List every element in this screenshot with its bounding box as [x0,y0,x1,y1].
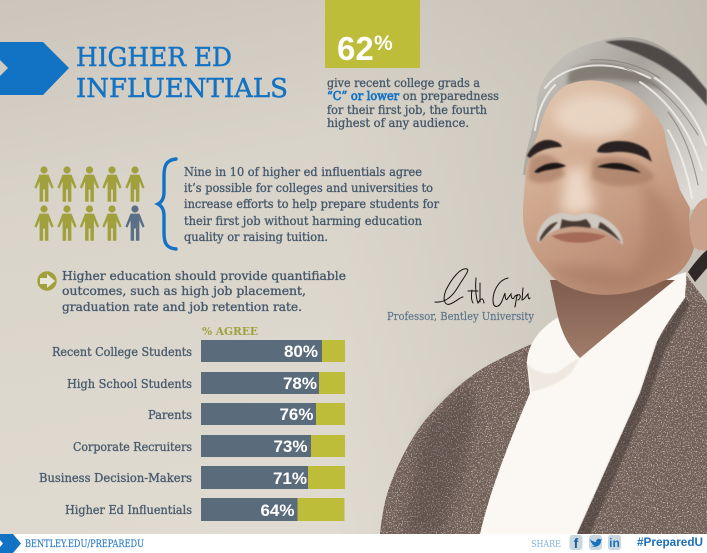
stat box: 62%: 62 [337,30,374,67]
bar: Higher Ed Influentials: 64% [260,501,294,520]
mustache dark [540,219,621,242]
paragraph: nine in ten: it’s possible for colleges and universities to [184,181,433,195]
icon: linkedin: in [609,536,620,550]
lips [552,232,606,243]
pictogram: nine of ten people [34,166,145,241]
bar: High School Students: 78% [283,374,317,393]
share label: SHARE [531,539,561,550]
stat text: “C” or lower on preparedness [327,89,499,103]
bar: High School Students: High School Students [67,377,192,391]
stat text: highest of any audience. [327,116,469,130]
signature [435,269,530,307]
forehead light [554,94,638,138]
title: INFLUENTIALS [76,74,288,104]
hair wisps [535,65,706,198]
ear [686,198,707,250]
shirt fold [527,358,580,392]
bar: Parents [148,403,345,425]
stat text: for their first job, the fourth [327,103,487,117]
nose highlight [561,165,596,214]
chart heading: % AGREE [202,324,258,338]
shirt [480,272,686,534]
face [523,80,694,295]
cheek shade [620,180,680,287]
statement text: graduation rate and job retention rate. [62,300,302,314]
statement text: outcomes, such as high job placement, [62,284,306,298]
mustache [537,213,623,245]
left eye [534,163,566,173]
dark hair streak [605,40,707,106]
title [76,43,288,104]
footer link: BENTLEY.EDU/PREPAREDU [25,539,144,550]
right eyebrow [597,141,652,162]
title arrow [0,42,69,95]
icon: arrow bullet [37,271,57,291]
bar: Parents: Parents [148,408,192,422]
bar: Corporate Recruiters: Corporate Recruiters [73,440,192,454]
icon: twitter [589,535,602,550]
bar: Business Decision-Makers [39,466,345,489]
stat text: give recent college grads a [327,76,480,90]
paragraph: nine in ten: their first job without harming education [184,214,422,228]
icon: facebook: f [574,535,579,551]
curly brace [158,159,176,249]
bar: Recent College Students: Recent College Students [52,345,192,359]
neck hair [688,250,707,282]
portrait photo [380,37,707,534]
chin shade [548,267,640,287]
stat box: 62%: % [374,32,393,55]
bar: Business Decision-Makers: Business Decision-Makers [39,471,192,485]
stat text [327,76,499,130]
hashtag: #PreparedU [637,535,703,549]
bar: Recent College Students: 80% [284,342,318,361]
title: HIGHER ED [76,43,232,73]
right eye [597,163,641,173]
bar: Higher Ed Influentials [65,498,344,521]
bar: Business Decision-Makers: 71% [273,469,307,488]
icon: facebook [570,535,582,551]
footer bar [0,534,707,553]
bar: Higher Ed Influentials: Higher Ed Influentials [65,503,192,517]
hair shade [568,63,668,92]
eye socket shade [528,154,655,186]
left eyebrow [527,140,562,158]
paragraph: nine in ten: Nine in 10 of higher ed influentials agree [184,165,422,179]
neck [550,280,675,358]
statement text: Higher education should provide quantifiable [62,269,346,283]
hair back [523,37,707,210]
paragraph: nine in ten: quality or raising tuition. [184,230,328,244]
paragraph: nine in ten [184,165,439,244]
footer arrow [0,534,21,553]
bar chart [39,324,345,521]
statement text [62,269,346,314]
bar: Parents: 76% [279,405,314,424]
bar: Corporate Recruiters [73,435,345,457]
paragraph: nine in ten: increase efforts to help prepare students for [184,197,439,211]
lapel edge [577,298,690,534]
jacket [380,275,707,534]
bar: Corporate Recruiters: 73% [273,437,308,456]
bar: High School Students [67,372,345,394]
stat box: 62% [325,0,420,68]
bar: Recent College Students [52,340,345,362]
attribution: Professor, Bentley University [387,309,534,323]
jacket dark sleeve fold [405,385,474,534]
